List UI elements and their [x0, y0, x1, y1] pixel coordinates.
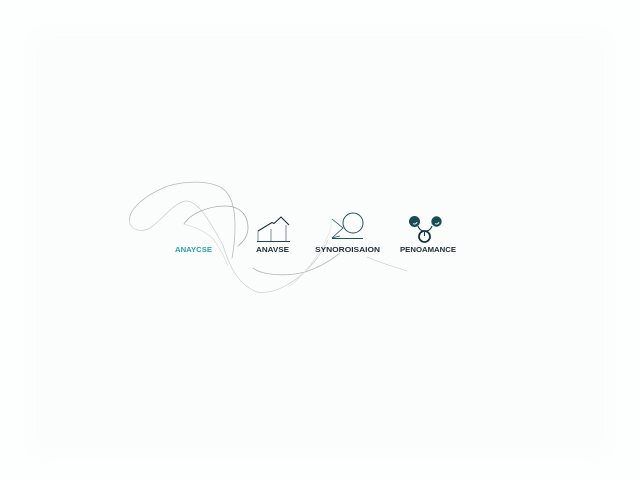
- icon: linked nodes: [409, 216, 442, 242]
- icon: house: [257, 217, 290, 242]
- label: dark first: ANAVSE: [256, 245, 289, 254]
- icon: circle with arrow: [332, 213, 363, 238]
- label: dark third: PENOAMANCE: [400, 245, 456, 254]
- flowing curved lines: [129, 182, 407, 292]
- label: dark second: SYNOROISAION: [315, 245, 380, 254]
- label: teal: ANAYCSE: [175, 245, 212, 254]
